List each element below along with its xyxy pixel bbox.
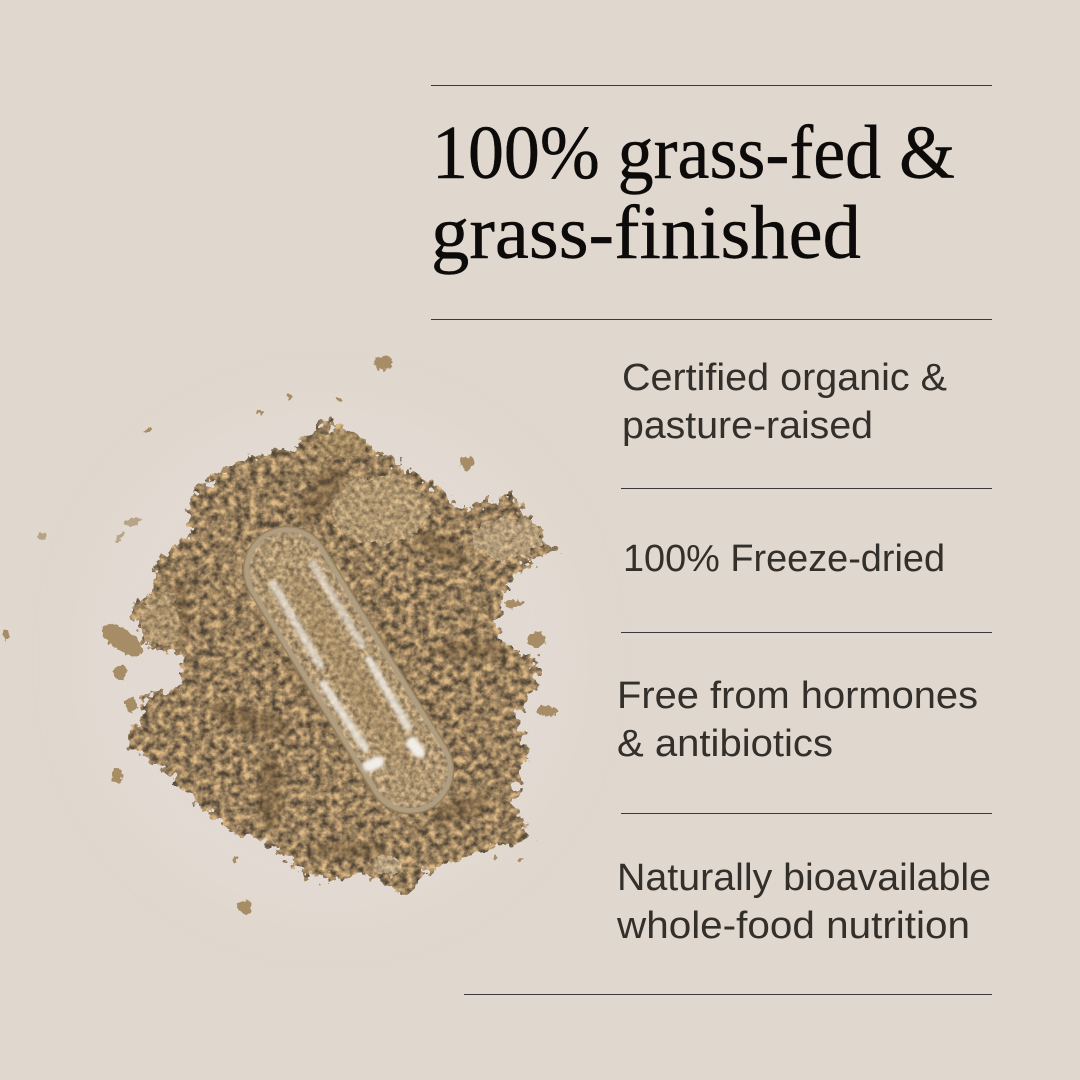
rule: below title [431,318,992,320]
benefit: certified organic: pasture-raised [622,405,873,447]
title [431,111,955,275]
stray crumbs [3,356,558,914]
rule: after benefit one [621,488,992,490]
title: 100% grass-fed & [432,111,955,195]
capsule highlights [273,564,419,766]
title: grass-finished [431,191,861,275]
shadow under capsule [243,547,461,813]
rule: bottom [464,994,992,996]
illustration: powder pile with capsule [3,356,580,920]
benefit: free from hormones: Free from hormones [617,675,978,717]
benefit: freeze-dried: 100% Freeze-dried [623,538,945,580]
rule: after benefit two [621,632,992,634]
rule: after benefit three [621,812,992,814]
benefit: certified organic: Certified organic & [622,357,947,399]
shadow crevices [171,456,510,858]
capsule [226,509,471,831]
rule: top [431,84,992,86]
benefit: bioavailable nutrition: Naturally bioavailable [617,857,991,899]
powder pile [130,420,557,897]
benefit: free from hormones: & antibiotics [617,723,833,765]
benefit: bioavailable nutrition: whole-food nutrition [616,905,970,947]
